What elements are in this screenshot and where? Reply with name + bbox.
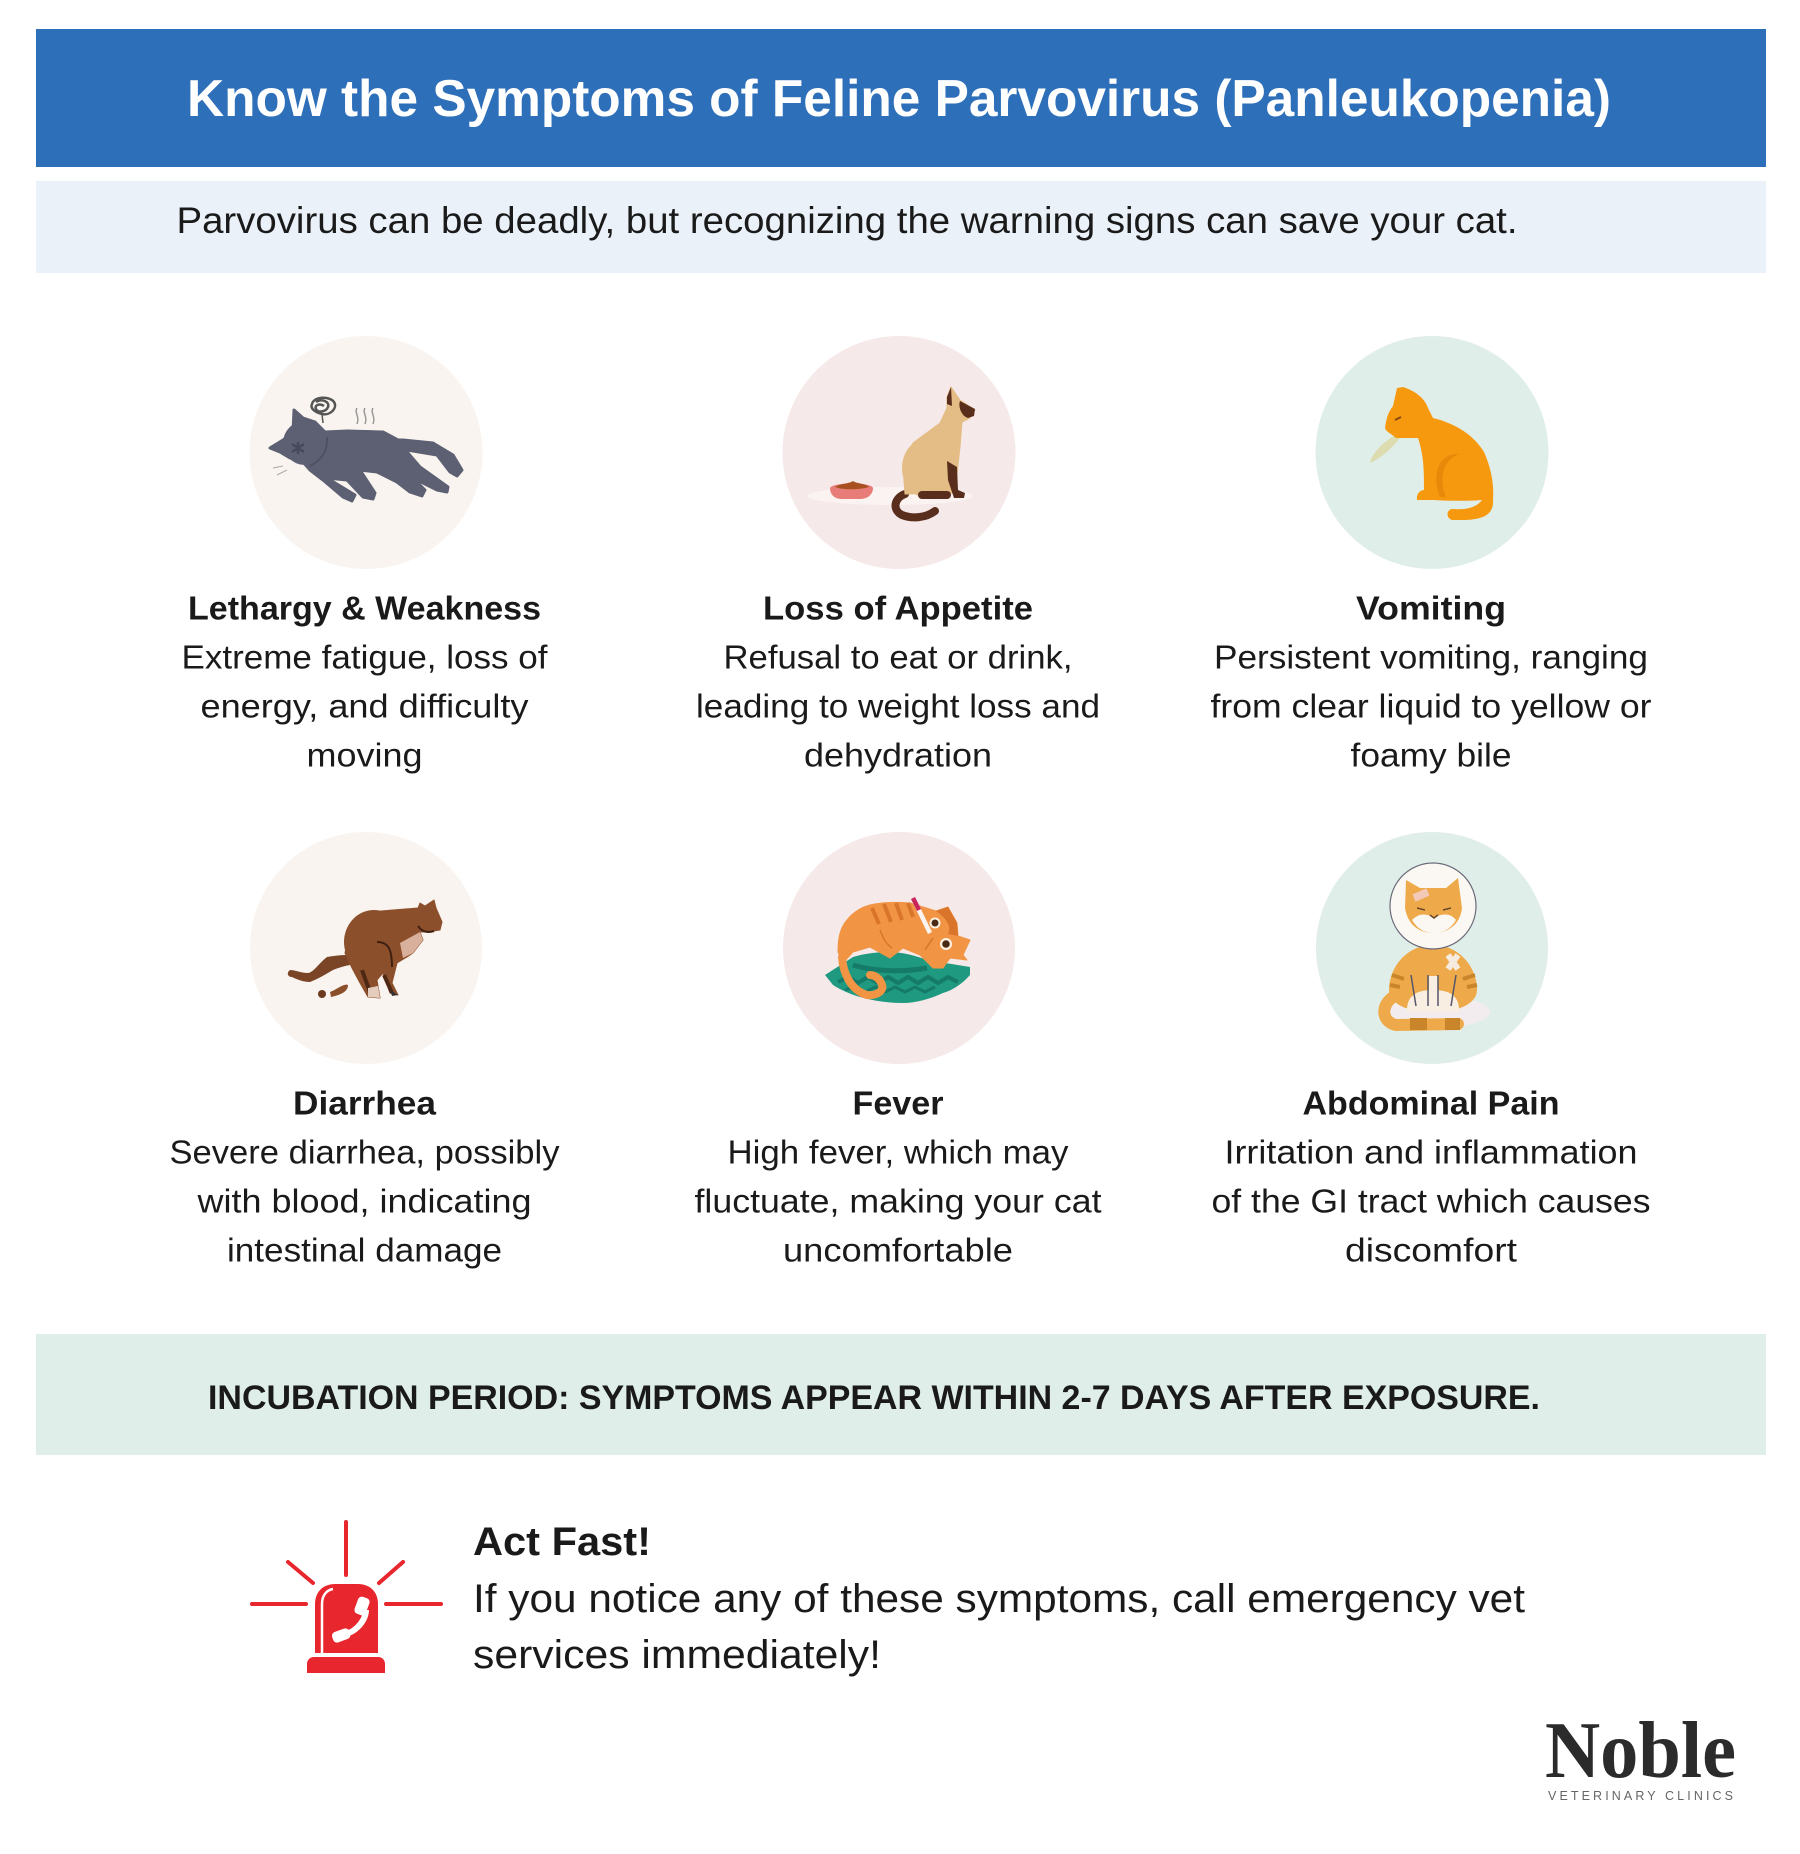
icon: orange cat vomiting <box>1316 336 1548 569</box>
heading: fever: Fever <box>852 1084 944 1122</box>
description: lethargy <box>182 638 548 774</box>
incubation period band: INCUBATION PERIOD: SYMPTOMS APPEAR WITHIN 2-7 DAYS AFTER EXPOSURE. <box>208 1379 1540 1417</box>
subtitle band <box>36 181 1766 273</box>
panel: diarrhea <box>170 832 560 1268</box>
panel: abdominal pain <box>1212 832 1650 1268</box>
panel: vomiting <box>1210 336 1652 774</box>
description: appetite: leading to weight loss and <box>696 688 1100 724</box>
panel: loss of appetite <box>696 336 1100 774</box>
callout: act fast <box>473 1520 1525 1677</box>
title banner: Know the Symptoms of Feline Parvovirus (Panleukopenia) <box>187 70 1611 128</box>
description: abdominal pain: discomfort <box>1345 1232 1517 1268</box>
icon: red emergency siren with phone <box>252 1522 441 1673</box>
icon: orange cats with thermometer on pillow <box>783 832 1015 1064</box>
description: appetite <box>696 638 1100 774</box>
description: diarrhea: intestinal damage <box>227 1232 502 1268</box>
subtitle band: Parvovirus can be deadly, but recognizing the warning signs can save your cat. <box>176 200 1518 241</box>
heading: appetite: Loss of Appetite <box>763 590 1033 626</box>
description: lethargy: moving <box>306 736 422 774</box>
description: appetite: Refusal to eat or drink, <box>724 638 1072 676</box>
icon: tired grey cat <box>250 336 482 569</box>
icon: siamese cat with food bowl <box>782 336 1016 569</box>
incubation period band <box>36 1334 1766 1455</box>
heading: diarrhea: Diarrhea <box>293 1084 437 1122</box>
description: appetite: dehydration <box>804 736 992 774</box>
icon: striped cat in cone <box>1316 832 1548 1064</box>
title banner <box>36 29 1766 167</box>
description: vomiting: from clear liquid to yellow or <box>1210 688 1652 724</box>
description: vomiting: Persistent vomiting, ranging <box>1214 638 1648 676</box>
description: fever: fluctuate, making your cat <box>694 1182 1102 1220</box>
heading: lethargy: Lethargy & Weakness <box>188 590 541 626</box>
description: vomiting: foamy bile <box>1350 736 1512 774</box>
description: diarrhea: with blood, indicating <box>196 1182 531 1220</box>
logo: Noble Veterinary Clinics: VETERINARY CLINICS <box>1548 1789 1733 1803</box>
description: abdominal pain: of the GI tract which causes <box>1212 1182 1650 1220</box>
logo: Noble Veterinary Clinics: Noble <box>1545 1707 1736 1795</box>
description: lethargy: energy, and difficulty <box>200 688 529 724</box>
icon: brown cat with diarrhea <box>250 832 482 1064</box>
description: vomiting <box>1210 638 1652 774</box>
description: fever: uncomfortable <box>783 1232 1013 1268</box>
description: fever <box>694 1134 1102 1268</box>
description: diarrhea: Severe diarrhea, possibly <box>170 1134 560 1170</box>
description: fever: High fever, which may <box>728 1134 1069 1170</box>
callout: act fast: Act Fast! <box>473 1520 651 1564</box>
description: abdominal pain <box>1212 1134 1650 1268</box>
callout: act fast: If you notice any of these symptoms, call emergency vet <box>473 1577 1525 1621</box>
description: abdominal pain: Irritation and inflammation <box>1224 1134 1638 1170</box>
panel: lethargy and weakness <box>182 336 548 774</box>
description: diarrhea <box>170 1134 560 1268</box>
description: lethargy: Extreme fatigue, loss of <box>182 638 548 676</box>
heading: abdominal pain: Abdominal Pain <box>1302 1084 1560 1122</box>
panel: fever <box>694 832 1102 1268</box>
callout: act fast: services immediately! <box>473 1633 881 1677</box>
heading: vomiting: Vomiting <box>1356 590 1506 626</box>
